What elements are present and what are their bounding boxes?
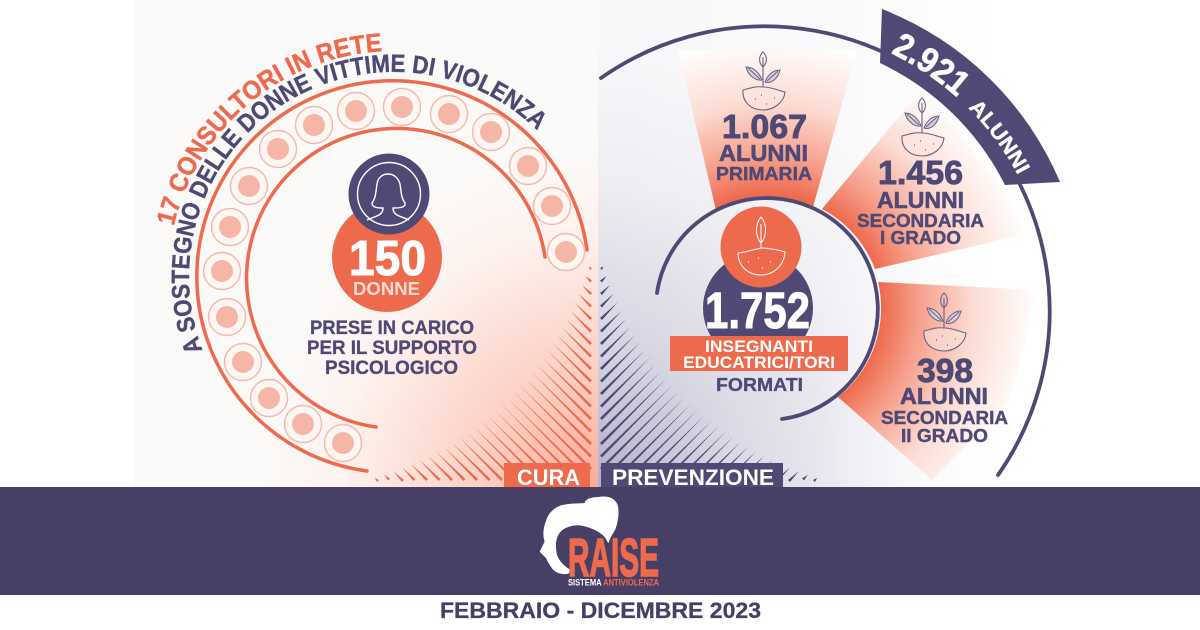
inner arc — [657, 198, 878, 419]
number: 1.456 alunni secondaria I grado — [857, 154, 984, 248]
text: prese in carico: PSICOLOGICO — [325, 358, 458, 379]
text: prese in carico: PRESE IN CARICO — [310, 318, 474, 339]
panel: prevenzione — [599, 9, 1060, 490]
number: 1.067 alunni primaria: ALUNNI — [719, 140, 808, 166]
ribbon: 2.921 alunni: ALUNNI — [968, 102, 1030, 174]
number: 398 alunni secondaria II grado — [881, 352, 1008, 446]
150 donne circle — [332, 202, 442, 312]
number 1.752: 1.752 — [705, 282, 810, 339]
plant: secondaria II grado — [924, 293, 966, 351]
number: 398 alunni secondaria II grado: 398 — [917, 352, 973, 389]
panel: cura background — [135, 0, 598, 487]
tag: insegnanti educatrici/tori: INSEGNANTI — [705, 337, 813, 356]
number: 1.067 alunni primaria — [716, 108, 812, 184]
number: 398 alunni secondaria II grado: II GRADO — [901, 426, 988, 446]
navy circle — [703, 253, 813, 363]
label: formati: FORMATI — [716, 375, 803, 395]
ribbon: 2.921 alunni — [880, 9, 1060, 185]
ribbon: 2.921 alunni: 2.921 — [891, 34, 968, 98]
logo: raise — [540, 497, 659, 588]
logo silhouette — [540, 497, 618, 574]
logo subtitle: SISTEMA ANTIVIOLENZA — [568, 578, 659, 588]
outer arc — [197, 81, 587, 471]
number: 398 alunni secondaria II grado: SECONDARIA — [881, 408, 1008, 428]
text: prese in carico — [307, 318, 477, 379]
number 150: 150 — [349, 232, 426, 286]
heading: a sostegno delle donne: A SOSTEGNO DELLE DONNE VITTIME DI VIOLENZA — [172, 54, 545, 350]
icon: central sprout — [720, 206, 802, 288]
number: 1.067 alunni primaria: 1.067 — [722, 108, 807, 145]
number: 1.456 alunni secondaria I grado: ALUNNI — [877, 187, 964, 213]
footer band — [0, 487, 1200, 595]
number: 1.456 alunni secondaria I grado: SECONDARIA — [857, 211, 984, 231]
wedge: secondaria II grado — [838, 282, 1038, 480]
icon: woman head — [348, 154, 430, 234]
number: 1.456 alunni secondaria I grado: 1.456 — [878, 154, 963, 191]
tag: cura: CURA — [517, 465, 580, 490]
heading: 17 consultori in rete: 17 CONSULTORI IN RETE — [158, 33, 382, 226]
hatching: prevenzione — [600, 267, 817, 482]
text: prese in carico: PER IL SUPPORTO — [307, 338, 477, 359]
plant: primaria — [743, 52, 785, 110]
number: 1.456 alunni secondaria I grado: I GRADO — [880, 228, 961, 248]
tag: prevenzione: PREVENZIONE — [612, 465, 774, 490]
logo word: RAISE — [568, 528, 659, 588]
label donne: DONNE — [353, 279, 420, 299]
inner arc — [247, 128, 545, 427]
tag: insegnanti educatrici/tori — [670, 336, 848, 372]
panel: prevenzione background — [598, 0, 1001, 487]
17 consultori circles — [204, 88, 584, 462]
number: 1.067 alunni primaria: PRIMARIA — [716, 164, 812, 184]
panel: cura — [158, 33, 590, 490]
wedge: primaria — [678, 50, 857, 210]
number: 398 alunni secondaria II grado: ALUNNI — [900, 383, 988, 409]
tag: cura — [504, 463, 590, 490]
date line: FEBBRAIO - DICEMBRE 2023 — [440, 598, 761, 623]
tag: insegnanti educatrici/tori: EDUCATRICI/TORI — [683, 353, 835, 372]
wedge: secondaria I grado — [822, 88, 1035, 269]
hatching: cura — [375, 267, 592, 482]
big arc — [601, 26, 1050, 475]
plant: secondaria I grado — [902, 98, 944, 156]
